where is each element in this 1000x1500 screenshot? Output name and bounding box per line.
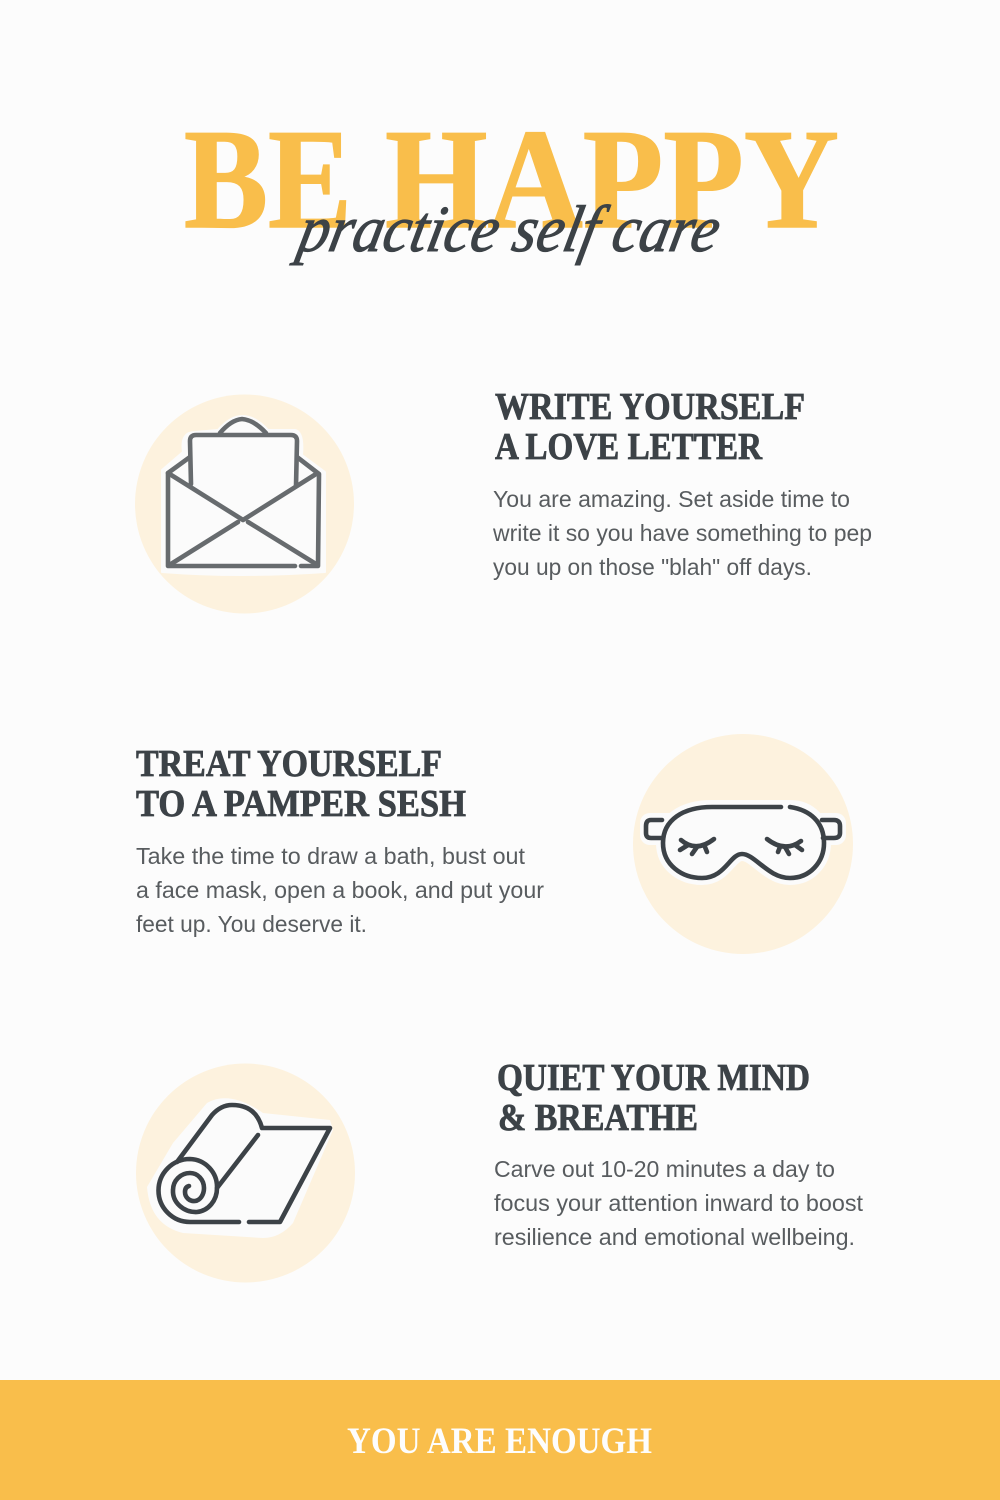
text: love letter description: you up on those "blah" off days. (493, 554, 812, 580)
text: pamper description: feet up. You deserve it. (136, 911, 367, 937)
heading: write yourself a love letter (495, 386, 805, 468)
heading: treat yourself to a pamper sesh: TREAT YOURSELF (136, 743, 442, 785)
panel: love letter (135, 386, 872, 614)
text: love letter description: You are amazing. Set aside time to (493, 486, 850, 512)
title: BE (184, 100, 352, 258)
heading: treat yourself to a pamper sesh (136, 743, 466, 825)
text: breathing description: focus your attention inward to boost (494, 1190, 864, 1216)
text: love letter description (492, 486, 872, 580)
heading: quiet your mind and breathe: QUIET YOUR MIND (497, 1057, 810, 1099)
icon: sleep mask (633, 734, 853, 954)
text: breathing description: Carve out 10-20 minutes a day to (494, 1156, 835, 1182)
panel: pamper session (136, 734, 853, 954)
title: HAPPY (385, 100, 839, 258)
text: pamper description: Take the time to draw a bath, bust out (136, 843, 526, 869)
heading: write yourself a love letter: WRITE YOURSELF (495, 386, 805, 428)
icon: envelope (135, 394, 354, 614)
text: breathing description (494, 1156, 864, 1250)
text: love letter description: write it so you have something to pep (492, 520, 872, 546)
heading: quiet your mind and breathe: & BREATHE (498, 1097, 698, 1139)
heading: write yourself a love letter: A LOVE LETTER (495, 426, 762, 468)
text: pamper description: a face mask, open a book, and put your (136, 877, 544, 903)
text: breathing description: resilience and emotional wellbeing. (494, 1224, 855, 1250)
banner text: YOU ARE ENOUGH (347, 1421, 652, 1462)
footer banner (0, 1380, 1000, 1500)
text: pamper description (136, 843, 544, 937)
subtitle: practice self care (289, 194, 727, 266)
icon: rolled yoga mat (136, 1064, 355, 1282)
title (184, 100, 839, 266)
heading: treat yourself to a pamper sesh: TO A PAMPER SESH (136, 783, 466, 825)
heading: quiet your mind and breathe (497, 1057, 810, 1139)
panel: quiet your mind (136, 1057, 864, 1282)
